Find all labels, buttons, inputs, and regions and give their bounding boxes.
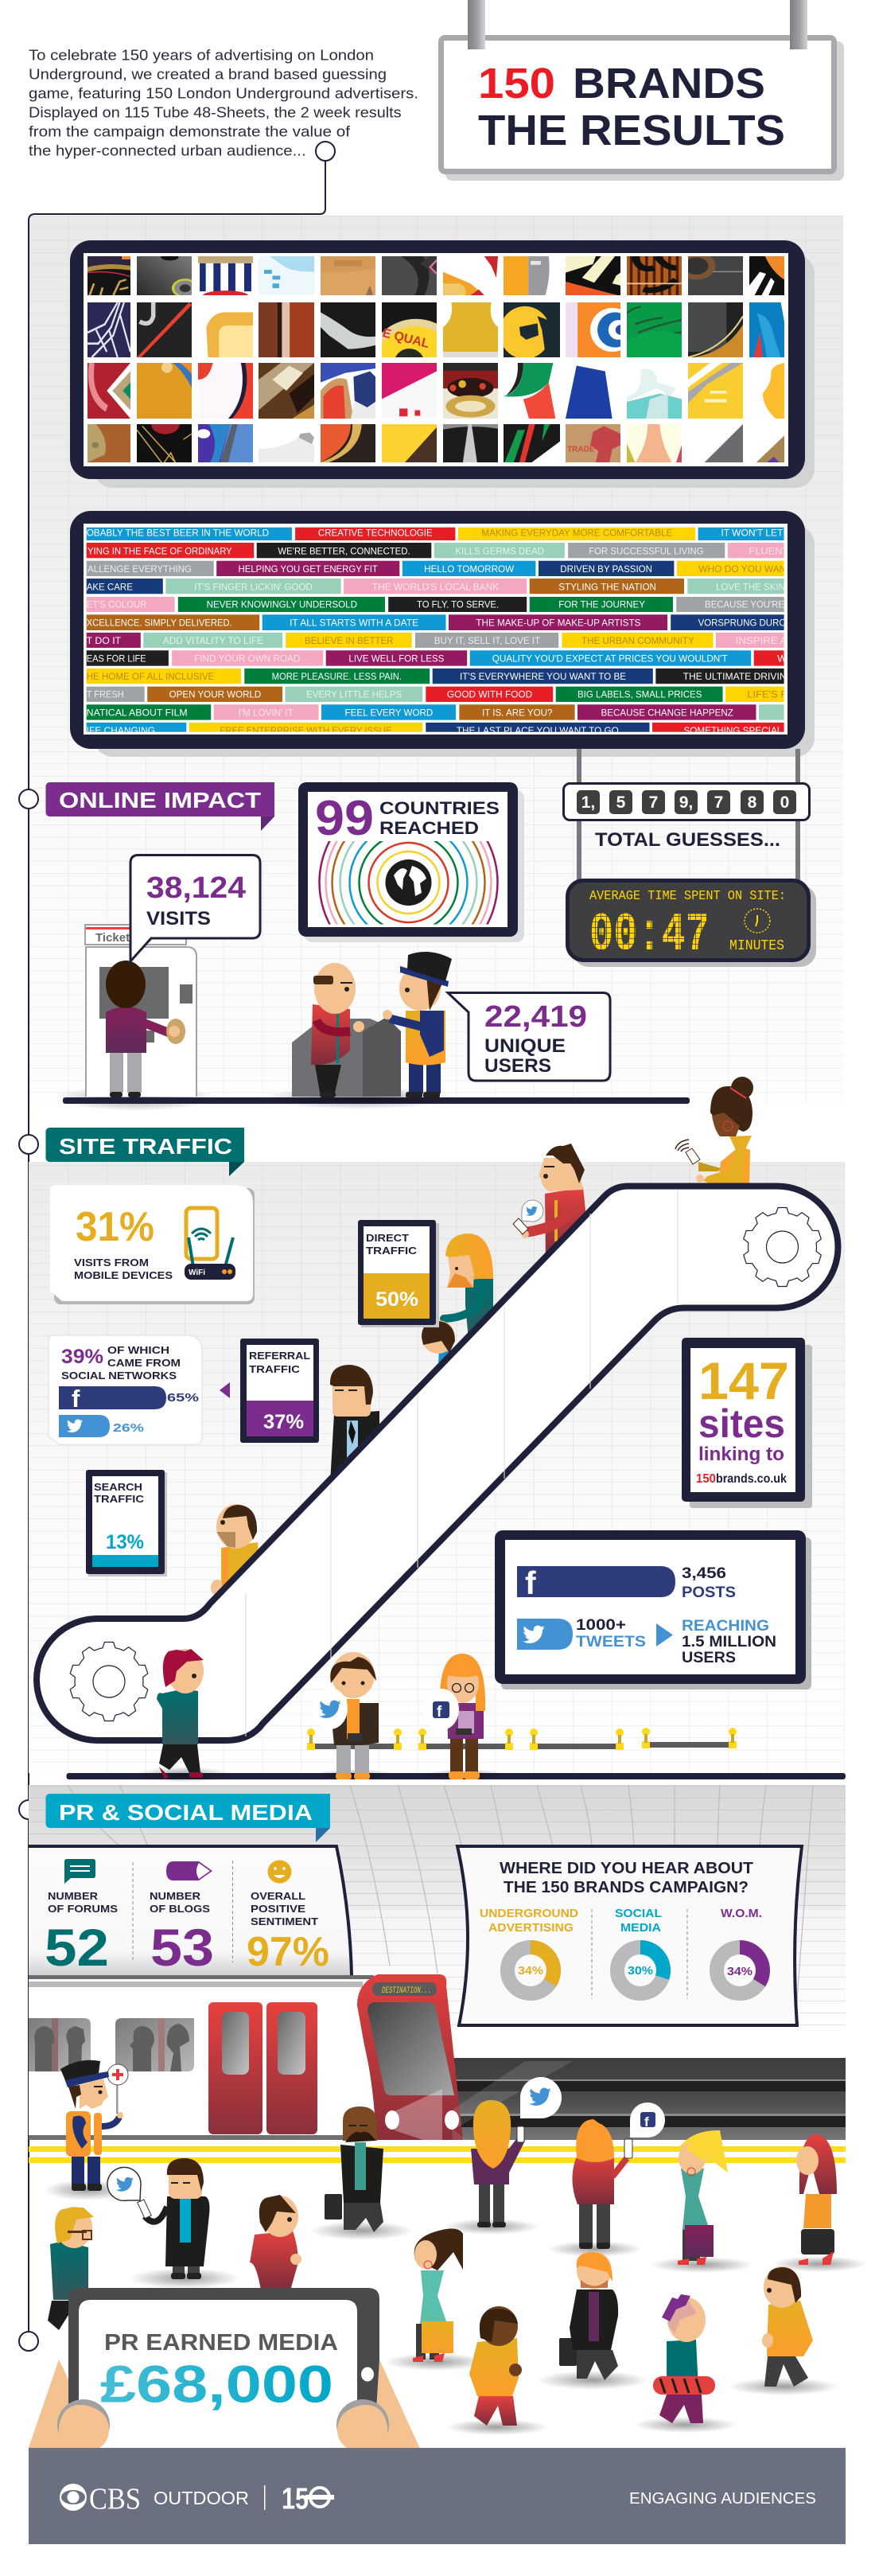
slogan bricks: MAKING EVERYDAY MORE COMFORTABLE [481,528,672,539]
intro text: Underground, we created a brand based guessing [29,66,387,83]
slogan bricks: BECAUSE YOU'RE [705,599,784,610]
slogan bricks: WE'RE BETTER, CONNECTED. [278,545,410,556]
board: 147 sites linking [682,1338,812,1508]
callout: 22,419 unique users: USERS [484,1055,551,1077]
callout: 38,124 visits: VISITS [146,908,211,929]
wall: upper tiled wall [29,216,843,1104]
slogan bricks: HELPING YOU GET ENERGY FIT [239,563,379,575]
conductor [383,952,452,1098]
hands and thumbs [29,2360,420,2450]
counter: total guesses: 7 [714,793,723,812]
slogan bricks: LOVE THE SKIN [716,581,785,592]
logo: CBS Outdoor 150: OUTDOOR [154,2488,249,2508]
icon: smiley [267,1861,291,1883]
LED board: average time: MINUTES [729,938,784,954]
board: social stats: USERS [682,1650,736,1666]
person: man with glasses in teal [48,2207,94,2330]
icon: phone and wifi router [185,1208,235,1280]
person: sitting man with phone [313,1652,394,1780]
arrow [220,1382,230,1398]
slogan bricks: IT IS. ARE YOU? [482,707,553,718]
panel: 99 countries reached: 99 [315,791,374,846]
slogan bricks: THE LAST PLACE YOU WANT TO GO [457,725,619,736]
counter: total guesses [563,783,810,851]
slogan bricks: BIG LABELS, SMALL PRICES [578,689,702,700]
slogan bricks: KILLS GERMS DEAD [455,545,544,556]
slogan bricks: INSPIRE A [736,635,788,646]
heading: site traffic [46,1128,244,1176]
tablet: PR earned media: £68,000 [100,2354,333,2413]
panel: forums, blogs, sentiment: SENTIMENT [251,1915,318,1927]
slogan bricks [80,528,789,736]
person: blonde woman [444,1233,493,1349]
slogan bricks: THE WORLD'S LOCAL BANK [372,581,499,592]
bar: twitter tweets: 1000+ [576,1617,626,1634]
person: woman with phone at top [675,1077,753,1183]
train doors [208,2002,317,2134]
person: bearded man with briefcase [537,2251,648,2390]
board: social stats: REACHING [682,1618,769,1635]
turnstile [292,1019,401,1097]
slogan bricks: CREATIVE TECHNOLOGIE [318,528,433,539]
panel: forums, blogs, sentiment: 52 [45,1918,109,1977]
ticket sign [85,925,186,945]
bar: twitter tweets: TWEETS [576,1634,646,1650]
bar: twitter tweets [517,1617,646,1650]
callout: 22,419 unique users: UNIQUE [484,1035,566,1057]
slogan bricks: I'M LOVIN' IT [239,707,294,718]
counter: total guesses: TOTAL GUESSES... [595,829,780,851]
panel: forums, blogs, sentiment: 53 [150,1918,214,1977]
person: small dark-haired man [422,1320,455,1381]
person: blonde girl with magenta bag [650,2130,753,2273]
slogan bricks: XCELLENCE. SIMPLY DELIVERED. [87,617,232,628]
note: social network share: CAME FROM [107,1357,181,1369]
escalator inner lines [246,1190,678,1736]
escalator gears [68,1208,823,1721]
logo: CBS Outdoor 150 [60,2483,334,2516]
person: man in red jacket [250,2195,301,2290]
panel: where did you hear [457,1846,802,2025]
panel: where did you hear: W.O.M. [721,1907,762,1920]
slogan bricks: GOOD WITH FOOD [447,689,533,700]
panel: forums, blogs, sentiment: 97% [247,1929,329,1975]
slogan bricks: LIFE'S F [747,689,787,700]
note: social network share: OF WHICH [107,1344,169,1356]
panel: forums, blogs, sentiment: OVERALL [251,1890,305,1902]
turnstile scene [262,952,453,1109]
slogan bricks: IT'S EVERYWHERE YOU WANT TO BE [460,671,626,682]
person: businessman with briefcase [310,2106,414,2240]
slogan bricks: HELLO TOMORROW [424,563,515,575]
bar: facebook 65% [59,1385,199,1413]
bar: facebook 65%: f [72,1385,80,1413]
intro text: game, featuring 150 London Underground advertisers. [29,84,418,101]
bar: twitter 26%: 26% [113,1421,144,1435]
card: referral traffic 37%: REFERRAL [249,1350,310,1362]
panel: forums, blogs, sentiment: OF BLOGS [150,1903,210,1915]
note: 31% mobile visits: 31% [76,1204,154,1250]
card: search traffic 13%: SEARCH [94,1481,142,1493]
icon: facebook bubble [630,2102,665,2138]
slogan bricks: YING IN THE FACE OF ORDINARY [88,545,232,556]
icon: twitter bubble [107,2167,141,2200]
slogan bricks: IT ALL STARTS WITH A DATE [290,617,418,628]
slogan bricks: T FRESH [87,689,124,700]
title sign: THE RESULTS [478,107,785,154]
LED board: average time [568,880,816,967]
bar: facebook posts: f [525,1565,536,1601]
note: 31% mobile visits: VISITS FROM [74,1257,149,1269]
panel: 99 countries reached: REACHED [379,818,479,838]
slogan bricks: BUY IT, SELL IT, LOVE IT [434,635,541,646]
ticket machine scene [56,925,690,1111]
benches [307,1728,737,1750]
slogan bricks: FOR THE JOURNEY [558,599,645,610]
person at machine [106,961,185,1097]
person: man in orange vest [728,2266,839,2395]
train [29,1974,573,2149]
icon: twitter bubble [520,2077,562,2118]
brand image tiles: TRADE [567,444,595,454]
slogan bricks: FIND YOUR OWN ROAD [194,653,301,664]
person: mohawk man with skateboard [634,2294,737,2433]
slogan bricks: ET'S COLOUR [87,599,147,610]
person: blonde woman with twitter [444,2077,562,2235]
brand image tiles [88,252,784,462]
slogan bricks: MORE PLEASURE. LESS PAIN. [272,671,402,682]
slogan bricks: FREE ENTERPRISE WITH EVERY ISSUE [220,725,391,736]
panel: forums, blogs, sentiment: OF FORUMS [48,1903,118,1915]
chart: coloured rings and globe [318,841,499,925]
card: search traffic 13% [86,1470,167,1576]
person: man with dark skin in yellow [445,2306,549,2435]
callout: 38,124 visits: 38,124 [146,871,246,905]
intro text [29,46,418,159]
counter: total guesses: 5 [616,793,626,812]
panel: forums, blogs, sentiment: NUMBER [150,1890,201,1902]
escalator [37,1186,838,1740]
note: social network share: SOCIAL NETWORKS [61,1370,177,1382]
panel: 99 countries reached: COUNTRIES [379,798,500,818]
slogan bricks: OBABLY THE BEST BEER IN THE WORLD [87,528,269,539]
panel: where did you hear: ADVERTISING [488,1921,574,1935]
icon: twitter bubble [522,1200,543,1222]
person: man in suit [328,1365,379,1524]
person: red-haired woman with black bag [772,2134,867,2272]
icon: blog pencil [166,1861,212,1880]
timeline connector [19,142,335,2351]
card: direct traffic 50% [358,1220,439,1327]
slogan bricks: EVERY LITTLE HELPS [306,689,402,700]
intro text: To celebrate 150 years of advertising on London [29,46,374,64]
slogan bricks: IFE CHANGING [87,725,155,736]
icon: forum bubble [64,1859,95,1884]
panel: forums, blogs, sentiment: POSITIVE [251,1903,305,1915]
person: ponytail woman with orange bag [384,2228,488,2371]
slogan bricks: EAS FOR LIFE [87,653,146,664]
note: social network share [49,1335,202,1444]
slogan bricks: THE ULTIMATE DRIVIN [683,671,787,682]
board: 147 sites linking: sites [698,1401,785,1446]
bar: facebook posts: POSTS [682,1584,736,1601]
slogan bricks: NATICAL ABOUT FILM [87,707,188,718]
ticket sign: Ticket [95,931,130,945]
board: 147 sites linking: 147 [698,1351,789,1410]
board: 147 sites linking: brands.co.uk [716,1472,787,1486]
slogan bricks: HE HOME OF ALL INCLUSIVE [87,671,214,682]
panel: where did you hear: MEDIA [620,1921,661,1935]
wall: site traffic tiled wall [29,1162,845,1773]
title sign: BRANDS [573,60,765,107]
tablet: PR earned media: PR EARNED MEDIA [104,2330,338,2356]
chart: donut social 30%: 30% [628,1964,653,1978]
slogan bricks: WHO DO YOU WAN [698,563,786,575]
card: search traffic 13%: 13% [106,1531,144,1553]
person: bearded man in yellow [211,1504,259,1596]
icon: facebook bubble: f [437,1704,442,1721]
heading: online impact: ONLINE IMPACT [59,788,261,813]
card: search traffic 13%: TRAFFIC [94,1493,145,1505]
slogan bricks: T DO IT [87,635,122,646]
panel: brand images board [70,240,815,488]
slogan bricks: FOR SUCCESSFUL LIVING [589,545,704,556]
train cab: DESTINATION... [382,1986,431,1996]
brand image tiles: E QUAL [381,326,431,351]
bar: facebook posts [517,1565,736,1601]
card: direct traffic 50%: 50% [375,1288,418,1311]
card: referral traffic 37%: TRAFFIC [249,1363,301,1375]
panel: where did you hear: THE 150 BRANDS CAMPAIGN? [504,1879,749,1896]
slogan bricks: ALLENGE EVERYTHING [88,563,192,575]
intro text: Displayed on 115 Tube 48-Sheets, the 2 week results [29,103,402,120]
counter: total guesses: 9, [679,793,693,812]
train cab [357,1974,573,2149]
slogan bricks: BELIEVE IN BETTER [305,635,394,646]
LED board: average time: 00:47 [589,905,710,966]
arrow [656,1623,673,1647]
floor bar [67,1773,846,1779]
title sign [441,0,844,181]
board: 147 sites linking: 150 [696,1472,716,1486]
card: referral traffic 37% [240,1339,319,1443]
train windows [29,2018,194,2071]
panel: where did you hear: WHERE DID YOU HEAR ABOUT [500,1860,753,1877]
slogan bricks: FEEL EVERY WORD [345,707,434,718]
board: 147 sites linking: linking to [698,1444,784,1465]
LED board: average time: AVERAGE TIME SPENT ON SITE: [589,889,786,904]
icon: phone and wifi router: WiFi [189,1269,205,1277]
heading: PR and social media: PR & SOCIAL MEDIA [59,1800,313,1825]
card: direct traffic 50%: TRAFFIC [366,1245,418,1257]
chart: donut word of mouth 34% [717,1947,763,1993]
panel: forums, blogs, sentiment [29,1846,352,1977]
counter: total guesses: 1, [581,793,595,812]
person: sitting woman with glasses [424,1654,505,1780]
counter: total guesses: 0 [780,793,789,812]
panel: where did you hear: UNDERGROUND [480,1907,578,1920]
slogan bricks: NEVER KNOWINGLY UNDERSOLD [207,599,357,610]
heading: site traffic: SITE TRAFFIC [59,1134,232,1159]
slogan bricks: ADD VITALITY TO LIFE [163,635,263,646]
ticket machine [86,947,196,1097]
slogan bricks: LIVE WELL FOR LESS [348,653,444,664]
note: social network share: 39% [61,1346,103,1368]
slogan bricks: SOMETHING SPECIAL I [683,725,787,736]
bald man [311,963,364,1097]
person: man in red jacket [513,1144,586,1261]
board: social stats [495,1530,811,1689]
bar: twitter 26% [59,1415,144,1437]
person: walking man with red hair [135,1649,231,1783]
icon: facebook bubble [424,1689,459,1730]
floor bar [63,1097,690,1104]
bar: facebook posts: 3,456 [682,1565,726,1582]
counter: total guesses: 8 [748,793,757,812]
slogan bricks: VORSPRUNG DURC [698,617,786,628]
slogan bricks: DRIVEN BY PASSION [560,563,652,575]
hanging posts [577,749,800,880]
note: 31% mobile visits: MOBILE DEVICES [74,1269,173,1281]
chart: donut underground 34% [508,1947,554,1993]
counter: total guesses: 7 [649,793,658,812]
person: man with orange hair and facebook [547,2102,665,2257]
panel: where did you hear: SOCIAL [615,1907,662,1920]
board: social stats: 1.5 MILLION [682,1634,776,1650]
wall: PR tiled wall [29,1785,846,2025]
intro text: from the campaign demonstrate the value of [29,123,351,139]
callout: 22,419 unique users: 22,419 [484,1000,587,1034]
card: referral traffic 37%: 37% [263,1411,304,1433]
heading: online impact [46,782,274,831]
slogan bricks: IT WON'T LET [721,528,784,539]
slogan bricks: BECAUSE CHANGE HAPPENZ [601,707,733,718]
panel: forums, blogs, sentiment: NUMBER [48,1890,99,1902]
slogan bricks: STYLING THE NATION [558,581,656,592]
callout: 22,419 unique users [448,993,610,1081]
logo: CBS Outdoor 150: 15 [282,2483,309,2516]
footer [29,2448,846,2544]
bar: facebook 65%: 65% [167,1391,199,1405]
footer: ENGAGING AUDIENCES [629,2490,816,2508]
yellow platform lines [29,2146,846,2163]
callout: 38,124 visits [130,855,260,961]
chart: donut social 30% [617,1947,663,1993]
note: 31% mobile visits [50,1185,255,1304]
slogan bricks: W [777,653,788,664]
person: suit man with twitter bubble [107,2158,240,2289]
panel: 99 countries reached [298,782,524,942]
person: conductor with paddle [44,2060,131,2200]
card: direct traffic 50%: DIRECT [366,1232,409,1244]
chart: donut word of mouth 34%: 34% [727,1965,752,1978]
logo: CBS Outdoor 150: CBS [89,2483,141,2516]
slogan bricks: THE URBAN COMMUNITY [581,635,694,646]
slogan bricks: THE MAKE-UP OF MAKE-UP ARTISTS [476,617,640,628]
tablet: PR earned media [29,2288,420,2450]
slogan bricks: QUALITY YOU'D EXPECT AT PRICES YOU WOULDN'T [492,653,728,664]
title sign: 150 [478,60,555,107]
slogan bricks: TO FLY. TO SERVE. [417,599,499,610]
chart: donut underground 34%: 34% [518,1964,543,1978]
tunnel [453,2058,846,2140]
intro text: the hyper-connected urban audience... [29,142,306,159]
panel: slogans board [70,511,815,757]
slogan bricks: IT'S FINGER LICKIN' GOOD [194,581,313,592]
slogan bricks: AKE CARE [87,581,133,592]
slogan bricks: FLUENT [749,545,789,556]
icon: facebook bubble: f [644,2114,649,2130]
heading: PR and social media [46,1794,330,1842]
slogan bricks: OPEN YOUR WORLD [169,689,262,700]
icon: twitter bubble [313,1688,348,1729]
